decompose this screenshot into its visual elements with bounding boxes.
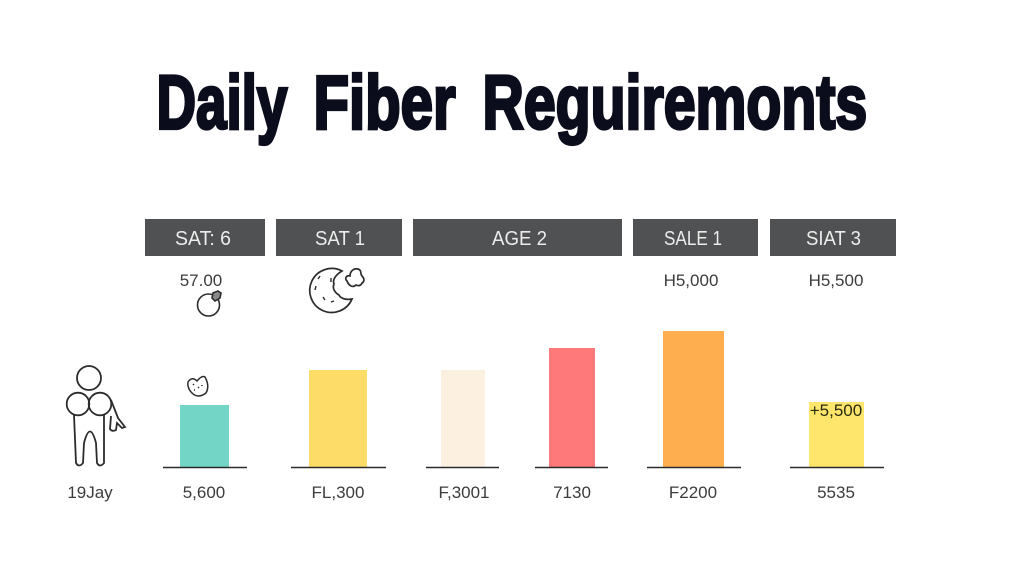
header row [145, 219, 896, 256]
header: SALE 1 [633, 219, 758, 256]
icon: strawberry [188, 376, 208, 396]
bar baselines [163, 466, 884, 468]
icon: bitten cookie [310, 268, 364, 312]
header: AGE 2 [413, 219, 622, 256]
header: SIAT 3: SIAT 3 [806, 228, 861, 250]
header: SALE 1: SALE 1 [664, 228, 722, 250]
bar: red [549, 348, 595, 467]
label: 19 Jay: 19Jay [67, 483, 113, 502]
bar: orange [663, 331, 724, 467]
label: 5,600: 5,600 [183, 483, 225, 502]
header: SIAT 3 [770, 219, 896, 256]
header: AGE 2: AGE 2 [492, 228, 547, 250]
header: SAT 1: SAT 1 [315, 228, 365, 250]
bar: light yellow [809, 402, 864, 467]
label: 7130: 7130 [553, 483, 591, 502]
icon: apple [198, 291, 221, 316]
bar: cream [441, 370, 485, 467]
label: 5535: 5535 [817, 483, 855, 502]
top value: H5,000: H5,000 [664, 271, 718, 290]
title: Fiber [314, 61, 456, 145]
label: F,3001: F,3001 [438, 483, 490, 502]
bar value: +5,500: +5,500 [810, 401, 862, 420]
title: Reguiremonts [482, 61, 867, 145]
title [156, 61, 867, 146]
icon: person [67, 366, 125, 466]
bottom labels [67, 483, 855, 502]
header: SAT: 6: SAT: 6 [175, 228, 231, 250]
bar: teal [180, 405, 229, 467]
header: SAT 1 [276, 219, 402, 256]
bar: yellow [309, 370, 367, 467]
label: F2200: F2200 [669, 483, 717, 502]
top value: 57.00: 57.00 [180, 271, 222, 290]
label: FL,300: FL,300 [312, 483, 364, 502]
top value: H5,500: H5,500 [809, 271, 863, 290]
header: SAT: 6 [145, 219, 265, 256]
title: Daily [156, 61, 287, 146]
